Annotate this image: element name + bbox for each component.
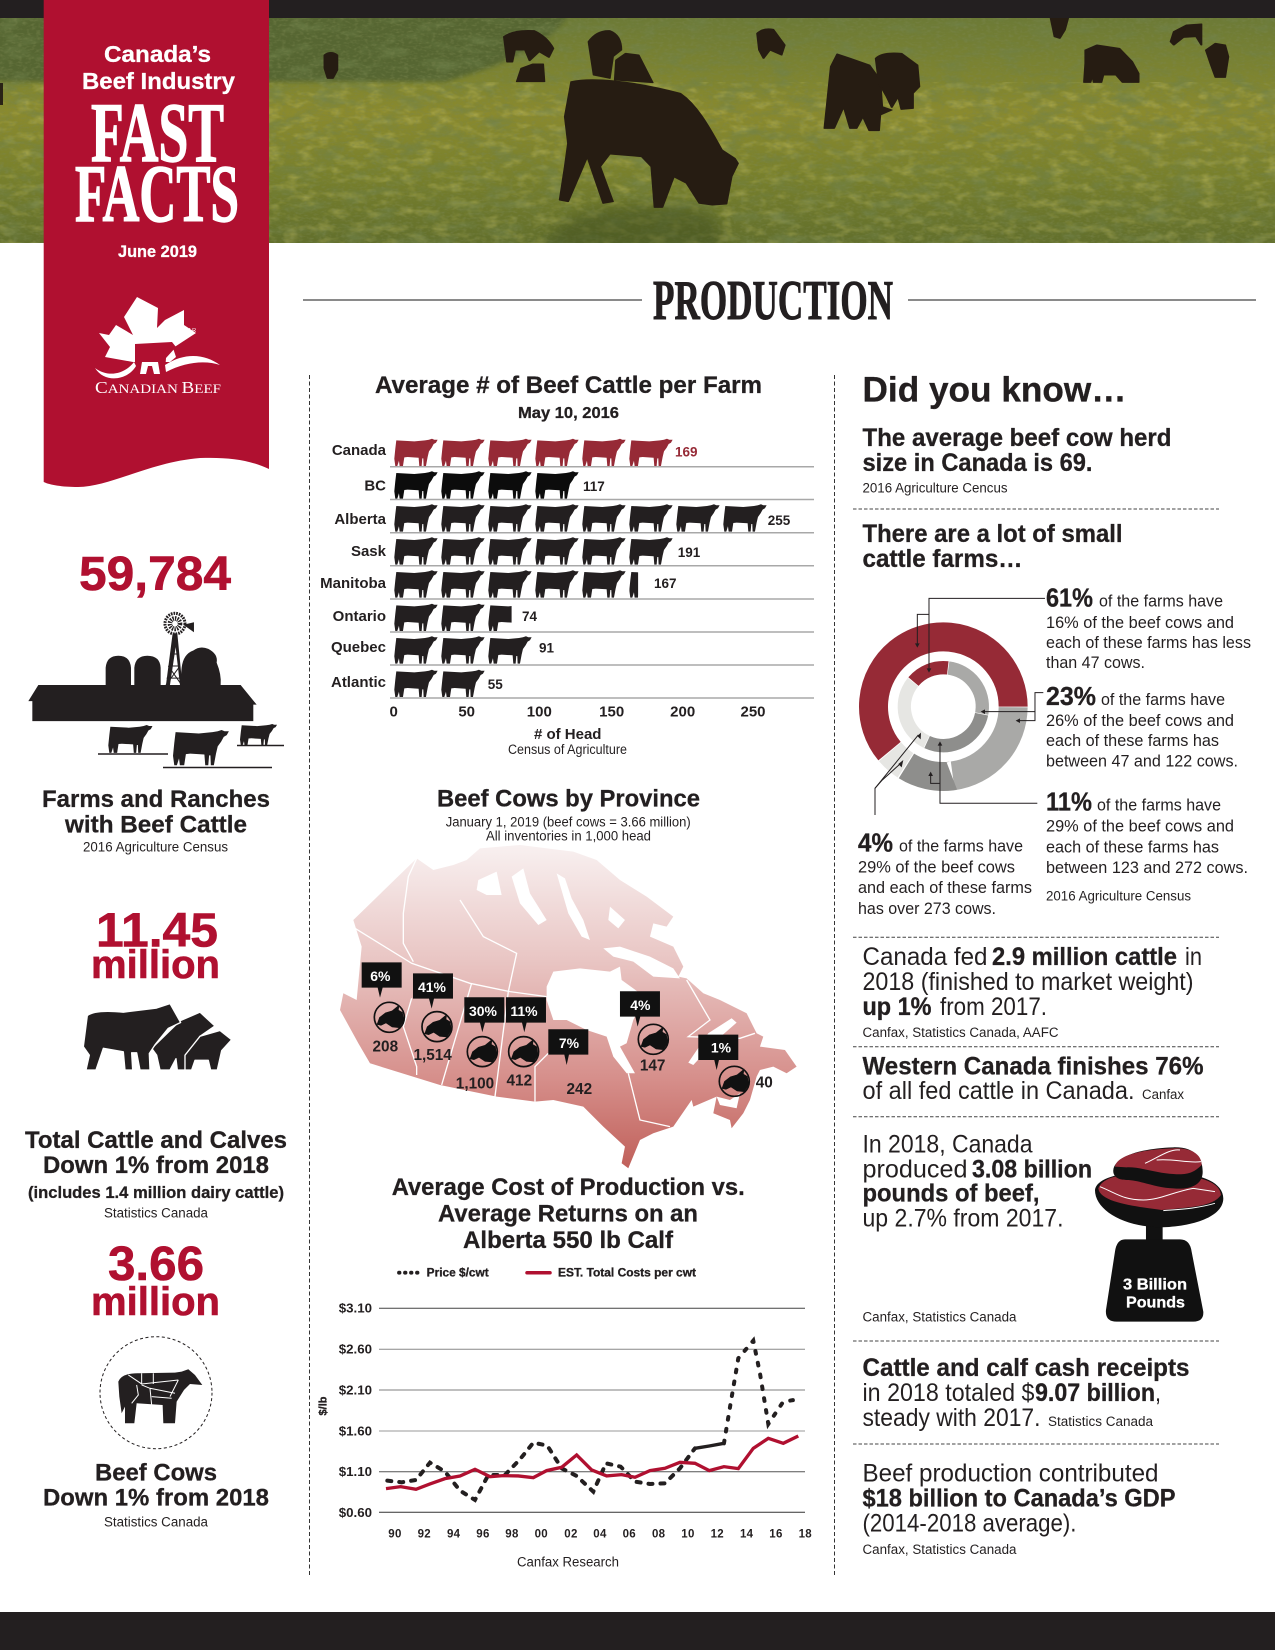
fast facts wordmark [75,86,239,239]
chart source: Canfax Research [517,1555,619,1570]
label: 11% of the farms: 11% [1046,787,1092,817]
fact: western canada finishes [862,1052,1204,1105]
fact: cattle fed: Canada fed [862,943,988,971]
x axis labels: 96 [476,1528,490,1540]
row: Atlantic 55: 55 [488,677,503,692]
label: 23% of the farms: between 47 and 122 cows. [1046,752,1238,771]
callout: Ontario 7%: 242 [567,1081,592,1098]
fact: cattle fed [862,943,1202,1040]
callout: Alberta 41% [413,973,453,1064]
grid lines [379,1308,805,1512]
y axis labels: $3.10 [339,1301,372,1316]
label: 4% of the farms [858,828,1032,918]
legend: Price $/cwt [427,1268,489,1280]
chart heading: Average Returns on an [438,1201,698,1228]
y axis labels: $0.60 [339,1505,372,1520]
stat: 11.45 million [91,905,220,987]
y axis labels: $2.60 [339,1342,372,1357]
fact: cattle fed: Canfax, Statistics Canada, AAFC [862,1025,1059,1040]
fact: cattle fed: from 2017. [940,993,1047,1021]
caption: total cattle and calves: Down 1% from 2018 [43,1152,269,1179]
label: 4% of the farms: 29% of the beef cows [858,858,1015,877]
fact: contribution to GDP: (2014-2018 average). [862,1510,1076,1538]
callout: Quebec 4%: 4% [630,997,651,1013]
x axis: 100 [527,704,552,721]
x axis labels: 16 [769,1528,783,1540]
row: Alberta 255: Alberta [334,511,387,528]
caption: farms and ranches: Farms and Ranches [42,786,270,813]
label: 61% of the farms [1046,583,1251,672]
row: Ontario 74: 74 [522,609,538,624]
fact: western canada finishes: Canfax [1142,1087,1184,1102]
x axis labels: 14 [740,1528,754,1540]
canadian beef logo: CANADIAN BEEF [95,378,221,397]
row: Canada 169: Canada [332,442,387,459]
banner title: Canada’s [104,41,211,67]
label: 23% of the farms: 23% [1046,681,1096,711]
callout: BC 6% [362,962,404,1056]
callout: Saskatchewan 30% [456,997,504,1092]
row: Alberta 255 [334,504,791,532]
x axis: 200 [670,704,695,721]
x axis labels: 06 [623,1528,636,1540]
y axis labels: $/lb [318,1396,330,1415]
callout: Alberta 41%: 1,514 [413,1047,452,1064]
x axis labels: 12 [711,1528,724,1540]
label: 4% of the farms: and each of these farms [858,878,1032,897]
fact: average herd size: 2016 Agriculture Cencus [862,481,1008,496]
top bar [0,0,1275,18]
fact: contribution to GDP [862,1460,1176,1557]
x axis: 250 [740,704,766,721]
hero photo: cattle grazing in a field [0,10,1275,250]
label: 23% of the farms: 26% of the beef cows and [1046,711,1234,730]
y axis labels [318,1301,372,1520]
caption: farms and ranches: with Beef Cattle [64,811,247,838]
callout: BC 6%: 6% [370,968,391,984]
row: Quebec 91: Quebec [331,639,386,656]
column dividers [310,375,834,1575]
x axis: # of Head [534,726,601,743]
callout: Manitoba 11% [506,997,546,1090]
fact: average herd size [862,424,1172,496]
x axis labels: 92 [418,1528,431,1540]
label: 61% of the farms: each of these farms has less [1046,633,1251,652]
icon: cow at right [240,724,277,745]
callout: Atlantic 1%: 40 [756,1074,773,1091]
map heading: January 1, 2019 (beef cows = 3.66 million) [446,815,691,830]
bottom bar [0,1612,1275,1650]
row: Sask 191 [351,537,701,565]
caption: total cattle and calves: (includes 1.4 million dairy cattle) [28,1183,284,1202]
row: Canada 169 [332,439,698,466]
panel: cost of production line chart [318,1174,812,1570]
x axis: 50 [458,704,475,721]
caption: farms and ranches: 2016 Agriculture Census [83,839,228,854]
fact: pounds of beef: Canfax, Statistics Canada [862,1310,1017,1325]
row: Ontario 74 [333,604,538,631]
map heading: Beef Cows by Province [437,786,700,813]
label: 11% of the farms: 29% of the beef cows and [1046,817,1234,836]
row: Ontario 74: Ontario [333,608,386,625]
icon: cow, heifer and calf [83,1004,232,1070]
map heading: All inventories in 1,000 head [486,829,651,844]
x axis: Census of Agriculture [508,742,627,757]
panel: beef cows by province [340,786,797,1168]
fact: average herd size: size in Canada is 69. [862,449,1092,477]
fact: pounds of beef: 3.08 billion [972,1155,1092,1183]
caption: total cattle and calves: Total Cattle and Calves [25,1127,287,1154]
icon: cow at left [108,725,152,753]
label: 61% of the farms: 16% of the beef cows and [1046,613,1234,632]
caption: farms and ranches [42,786,270,854]
row: Atlantic 55 [331,670,503,697]
chart title: May 10, 2016 [518,405,619,422]
hero cows [324,18,1228,207]
row: BC 117: 117 [583,479,605,494]
row: BC 117: BC [364,478,386,495]
caption: beef cows: Statistics Canada [104,1515,208,1530]
fact: cattle fed: in [1185,943,1202,971]
stat: 3.66 million: million [91,1280,220,1324]
caption: beef cows: Beef Cows [95,1460,217,1487]
fact: contribution to GDP: Beef production contributed [862,1460,1158,1488]
icon: scale with steaks: 3 Billion [1123,1276,1187,1293]
row: BC 117 [364,471,605,499]
label: 23% of the farms: of the farms have [1101,690,1225,709]
fact: western canada finishes: of all fed cattle in Canada. [862,1077,1134,1105]
callout: Saskatchewan 30%: 30% [469,1003,498,1019]
x axis labels: 18 [799,1528,812,1540]
row: Canada 169: 169 [675,445,698,460]
x axis labels: 04 [593,1528,607,1540]
fact: cash receipts: , [1155,1379,1161,1407]
chart title [375,372,762,422]
fact: western canada finishes: Western Canada finishes 76% [862,1052,1204,1080]
label: 61% of the farms: 61% [1046,583,1093,613]
x axis labels: 94 [447,1528,461,1540]
date: June 2019 [118,243,197,261]
fact: cattle fed: 2.9 million cattle [992,943,1177,971]
stat: 11.45 million: 11.45 [96,905,218,958]
fact heading: small cattle farms: There are a lot of small [862,520,1122,548]
right panel: did you know [845,371,1251,1557]
label: 11% of the farms: between 123 and 272 cows. [1046,858,1248,877]
label: 4% of the farms: has over 273 cows. [858,899,996,918]
chart title: Average # of Beef Cattle per Farm [375,372,762,399]
y axis labels: $1.60 [339,1424,372,1438]
label: 23% of the farms: each of these farms has [1046,731,1219,750]
fact: cattle fed: 2018 (finished to market weight) [862,968,1194,996]
label: 4% of the farms: of the farms have [899,837,1023,856]
callout: Saskatchewan 30%: 1,100 [456,1075,494,1092]
red ribbon banner [44,0,269,487]
fact: contribution to GDP: Canfax, Statistics Canada [862,1542,1017,1557]
chart heading [392,1174,745,1254]
icon: scale with steaks: Pounds [1126,1294,1185,1311]
legend [399,1268,696,1280]
row: Atlantic 55: Atlantic [331,674,386,691]
stat: 11.45 million: million [91,943,220,987]
callout: Atlantic 1%: 1% [711,1039,732,1055]
left panel: key statistics [25,548,287,1530]
legend: EST. Total Costs per cwt [558,1268,696,1280]
fact: cash receipts: steady with 2017. [862,1404,1040,1432]
fact: pounds of beef: up 2.7% from 2017. [862,1205,1064,1233]
x axis: 0 [390,704,398,721]
label: 11% of the farms: each of these farms has [1046,838,1219,857]
banner title: Beef Industry [82,68,235,94]
fact: cash receipts: Cattle and calf cash receipts [862,1354,1190,1382]
y axis labels: $2.10 [339,1382,372,1398]
icon: farm with silos, windmill and cattle [28,613,284,768]
label: 4% of the farms: 4% [858,828,893,858]
canadian beef logo: M.R [186,328,196,334]
caption: beef cows [43,1460,269,1530]
map heading [437,786,700,844]
chart heading: Average Cost of Production vs. [392,1174,745,1201]
label: 11% of the farms: of the farms have [1097,796,1221,815]
row: Sask 191: 191 [678,545,701,560]
x axis labels: 00 [535,1528,548,1540]
fact: cash receipts: in 2018 totaled $ [862,1379,1035,1407]
label: 61% of the farms: of the farms have [1099,592,1223,611]
fast facts wordmark: FAST [91,86,224,180]
callout: Manitoba 11%: 412 [507,1073,532,1090]
x axis: 150 [599,704,624,721]
x axis [390,704,766,757]
row: Alberta 255: 255 [768,513,791,528]
x axis labels: 10 [681,1528,695,1540]
icon: cow with beef cuts in dashed circle [100,1337,212,1449]
caption: total cattle and calves [25,1127,287,1221]
banner title [82,41,235,94]
heading: Did you know… [862,371,1126,410]
fact: cash receipts: 9.07 billion [1035,1379,1155,1407]
x axis labels: 98 [505,1528,519,1540]
x axis labels: 08 [652,1528,666,1540]
chart heading: Alberta 550 lb Calf [463,1227,674,1254]
label: 23% of the farms [1046,681,1238,771]
row: Manitoba 167: 167 [654,576,677,591]
callout: BC 6%: 208 [373,1039,399,1056]
x axis labels: 90 [388,1528,402,1540]
label: 61% of the farms: than 47 cows. [1046,653,1145,672]
fact: pounds of beef [862,1131,1092,1325]
callout: Quebec 4%: 147 [640,1058,665,1075]
stat: 59,784: 59,784 [79,548,231,601]
row: Quebec 91: 91 [539,641,555,656]
map of Canada with percentage callouts [340,845,797,1168]
row: Manitoba 167: Manitoba [320,575,387,592]
section heading: production: PRODUCTION [653,270,893,332]
x axis labels [388,1528,812,1540]
stat: 3.66 million: 3.66 [108,1238,204,1291]
donut chart: farms vs beef cows [845,598,1045,815]
stat: 3.66 million [91,1238,220,1324]
fast facts wordmark: FACTS [75,148,239,239]
fact: pounds of beef: pounds of beef, [862,1180,1040,1208]
callout: Quebec 4% [620,991,668,1075]
icon: scale with steaks [1095,1147,1223,1322]
fact: pounds of beef: produced [862,1155,968,1183]
row: Manitoba 167 [320,570,677,598]
label: 11% of the farms [1046,787,1248,904]
fact: average herd size: The average beef cow herd [862,424,1172,452]
fact: cash receipts: Statistics Canada [1048,1414,1153,1429]
fact: pounds of beef: In 2018, Canada [862,1131,1033,1159]
row: Quebec 91 [331,636,555,664]
callout: Atlantic 1% [698,1035,773,1096]
x axis labels: 02 [564,1528,578,1540]
row: Sask 191: Sask [351,543,387,560]
y axis labels: $1.10 [339,1464,372,1479]
fact heading: small cattle farms [862,520,1122,573]
callout: Ontario 7% [548,1029,592,1098]
chart lines: price and estimated total costs [386,1341,798,1500]
callout: Manitoba 11%: 11% [510,1003,538,1019]
icon: cow at centre [173,730,229,765]
canadian beef logo [95,297,221,397]
fact: cash receipts [862,1354,1190,1432]
callout: Alberta 41%: 41% [418,979,447,995]
label: 11% of the farms: 2016 Agriculture Census [1046,889,1191,904]
caption: beef cows: Down 1% from 2018 [43,1485,269,1512]
fact: contribution to GDP: $18 billion to Canada’s GDP [862,1485,1176,1513]
fact: cattle fed: up 1% [862,993,932,1021]
panel: average beef cattle per farm pictogram chart [320,372,814,757]
fact heading: small cattle farms: cattle farms… [862,545,1022,573]
callout: Ontario 7%: 7% [559,1035,580,1051]
caption: total cattle and calves: Statistics Canada [104,1206,208,1221]
